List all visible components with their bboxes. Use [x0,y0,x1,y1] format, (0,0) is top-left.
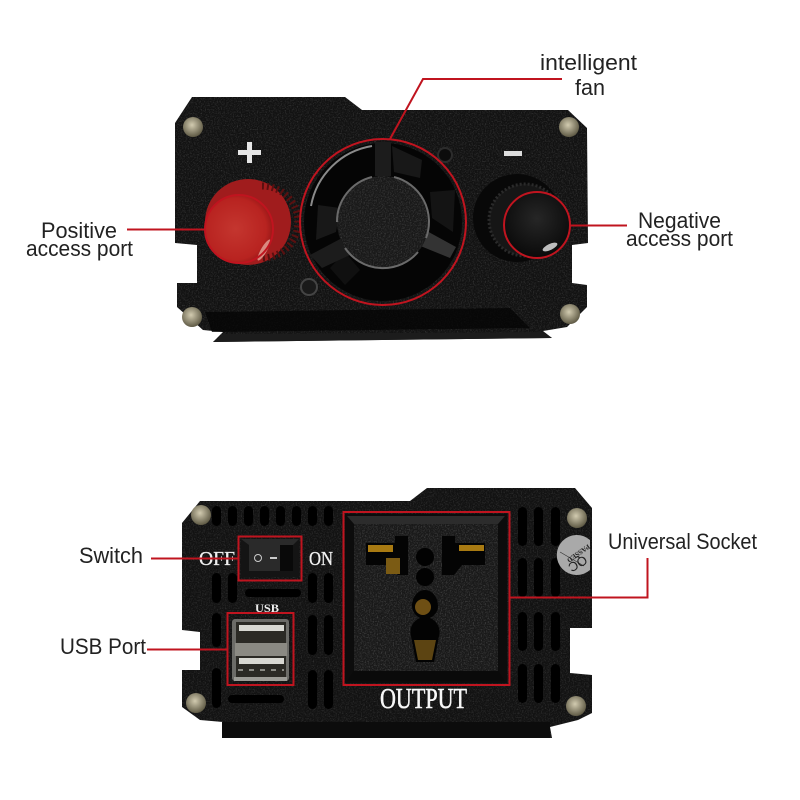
label: Switch: Switch [79,543,143,568]
panel: front view of inverter (AC output) [182,488,592,738]
icon: minus sign [504,151,522,156]
fan hub and spokes [310,142,456,268]
callout: USB box and leader [147,613,294,685]
label: OUTPUT: OUTPUT [380,684,467,715]
label: USB Port: USB Port [60,634,146,659]
label: negative access port [626,208,733,251]
label: intelligent fan: intelligent [540,50,637,75]
icon: corner screws [182,117,580,327]
ventilation slots [212,506,560,709]
label: Universal Socket: Universal Socket [608,529,757,554]
icon: dual USB port [232,619,289,681]
callout: switch box and leader [151,536,302,580]
label: USB: USB [255,601,279,615]
top housing plate [175,97,588,342]
icon: QC passed sticker: PASSED [565,542,591,564]
label: negative access port: access port [626,226,733,251]
icon: positive terminal, red cap [205,179,298,265]
icon: QC passed sticker: QC [566,552,590,575]
icon: plus sign [238,142,261,163]
icon: cooling fan [301,142,462,301]
label: positive access port [26,218,133,261]
front housing plate [182,488,592,738]
label: positive access port: Positive [41,218,117,243]
callout: positive ring and leader [127,195,273,263]
callout: socket box and leader [344,512,648,685]
icon: negative terminal, black cap [473,174,569,262]
label: positive access port: access port [26,236,133,261]
label: intelligent fan: fan [575,75,605,100]
icon: corner screws [186,505,587,716]
icon: universal socket [345,514,507,683]
icon: QC passed sticker [557,535,591,575]
icon: rocker switch [241,539,299,577]
label: OFF: OFF [199,548,235,570]
callout: negative ring and leader [504,192,627,258]
label: ON: ON [309,548,333,570]
label: intelligent fan [540,50,637,100]
label: negative access port: Negative [638,208,721,233]
panel: top view of inverter (DC terminals) [175,97,588,342]
callout: fan ring and leader [300,79,562,305]
